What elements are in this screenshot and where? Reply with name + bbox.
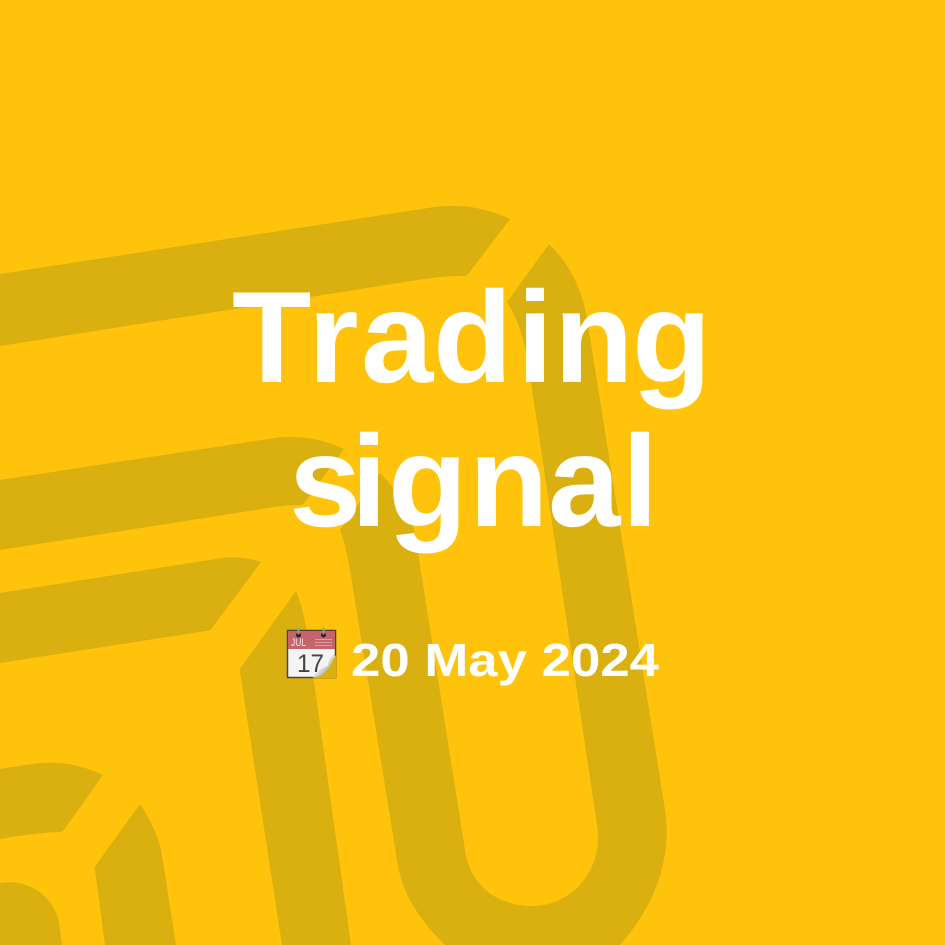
title line 2: signal (289, 408, 658, 554)
icon: calendar (288, 628, 336, 678)
title line 1: Trading (232, 264, 711, 410)
title (232, 264, 711, 554)
icon: calendar: JUL (291, 637, 306, 649)
icon: calendar: 17 (297, 650, 324, 678)
date: 20 May 2024 (351, 634, 659, 686)
background logo pattern (0, 206, 667, 945)
